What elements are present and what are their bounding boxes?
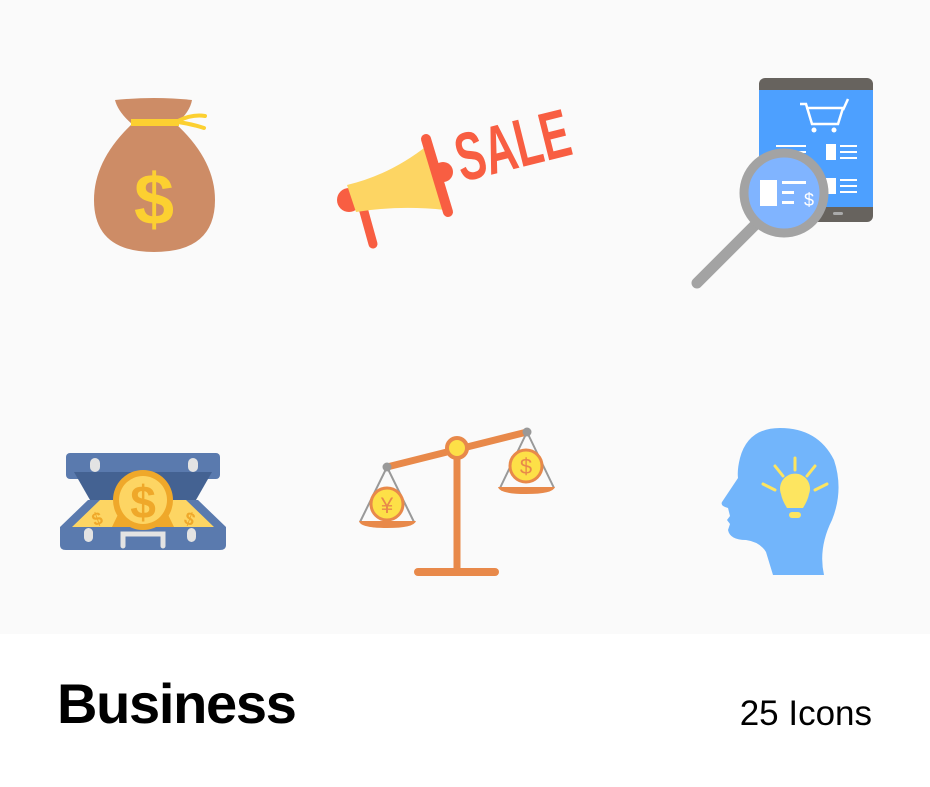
icon: megaphone with SALE <box>337 95 578 244</box>
icon: money bag <box>94 98 215 252</box>
icon: briefcase of money: $ <box>130 476 156 528</box>
title: Business <box>57 672 296 735</box>
icon: balance scale <box>359 428 555 572</box>
icon: briefcase of money: $ <box>182 508 198 530</box>
icon: money bag: $ <box>134 160 174 240</box>
icon: tablet with magnifier <box>697 78 873 283</box>
icon: megaphone with SALE: SALE <box>447 95 578 197</box>
icon: head with lightbulb <box>722 428 839 575</box>
icon: tablet with magnifier: $ <box>804 190 814 210</box>
subtitle: icon count: 25 Icons <box>740 694 872 733</box>
icon: briefcase of money: $ <box>89 508 105 530</box>
icon: balance scale: $ <box>520 454 532 479</box>
icon: briefcase of money <box>60 453 226 550</box>
icon: balance scale: ¥ <box>380 493 394 518</box>
